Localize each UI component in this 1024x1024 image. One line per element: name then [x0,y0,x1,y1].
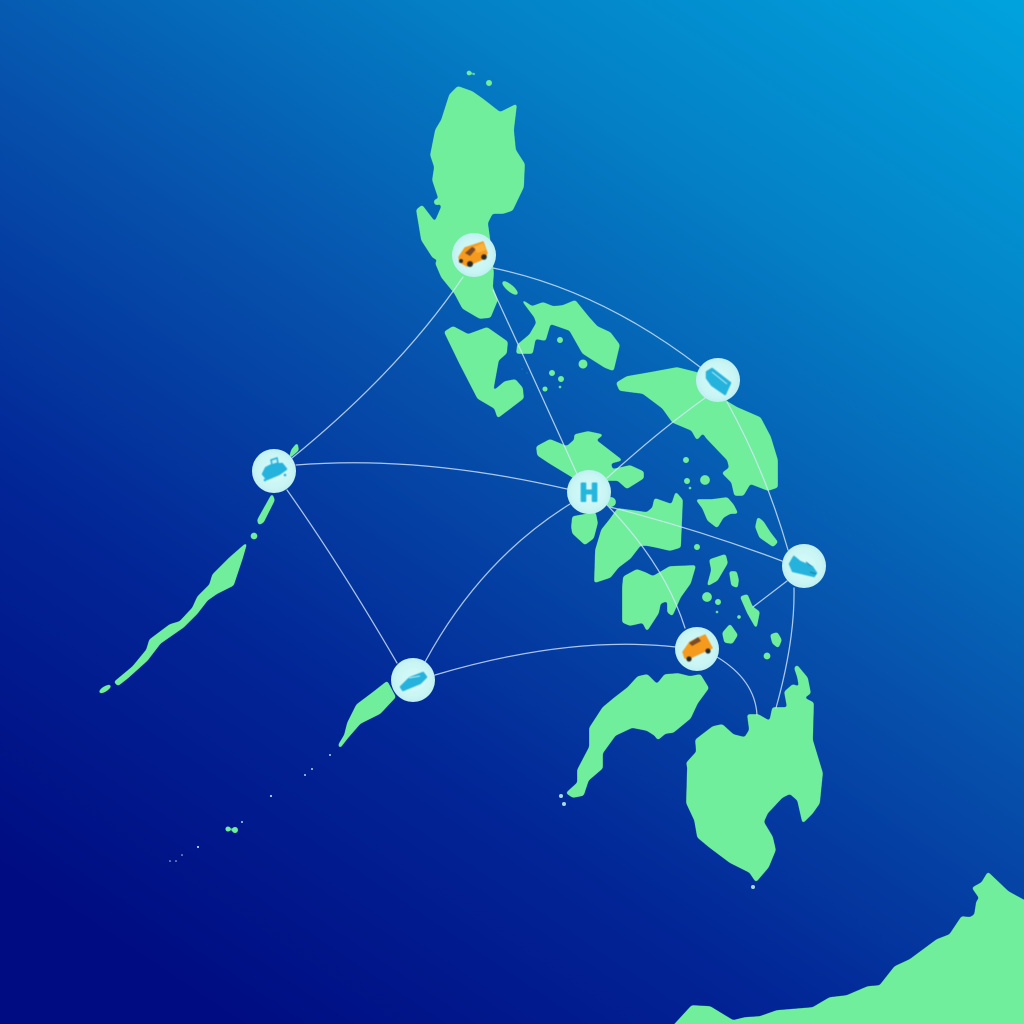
node: western with teal vehicle [252,449,296,493]
icon: teal vehicle [790,557,816,576]
island: Luzon [417,87,524,318]
islets: Sulu dots [225,826,238,833]
island: south of hub [572,513,597,544]
icon: teal vehicle [401,673,426,690]
small central islands [606,457,781,660]
icon: orange car [683,635,712,662]
icon: orange car [459,242,487,267]
island: small northern islets [434,70,588,392]
node: southern with orange car [675,627,719,671]
island: Panay [537,432,643,490]
node: northern hub with orange car [452,233,496,277]
island: Cebu area [623,566,695,630]
island: Zamboanga peninsula [567,674,708,797]
islets around Palawan [98,444,298,695]
land: central islands [537,368,781,660]
island: south-west chain [339,682,395,747]
node: eastern upper with teal vehicle [696,358,740,402]
icon: hub letter: H [580,479,598,507]
island: Palawan [115,544,246,685]
node: central hub [567,470,611,514]
scattered specks [169,754,755,889]
land: bottom right landmass [670,873,1024,1024]
island: Samar and Leyte [617,368,777,495]
island: Bicol peninsula [517,301,619,370]
land: southern islands [567,666,1024,1024]
route network lines [287,268,794,715]
icon: teal vehicle [707,369,730,394]
land: northern islands [417,70,619,417]
island: Mindanao [687,666,822,881]
node: eastern lower with teal vehicle [782,544,826,588]
node: south-western with teal vehicle [391,658,435,702]
island: Negros [595,493,682,582]
island: Bohol [697,498,737,527]
land: western islands [98,444,395,833]
island: Mindoro [445,327,523,417]
icon: teal vehicle [263,458,286,481]
